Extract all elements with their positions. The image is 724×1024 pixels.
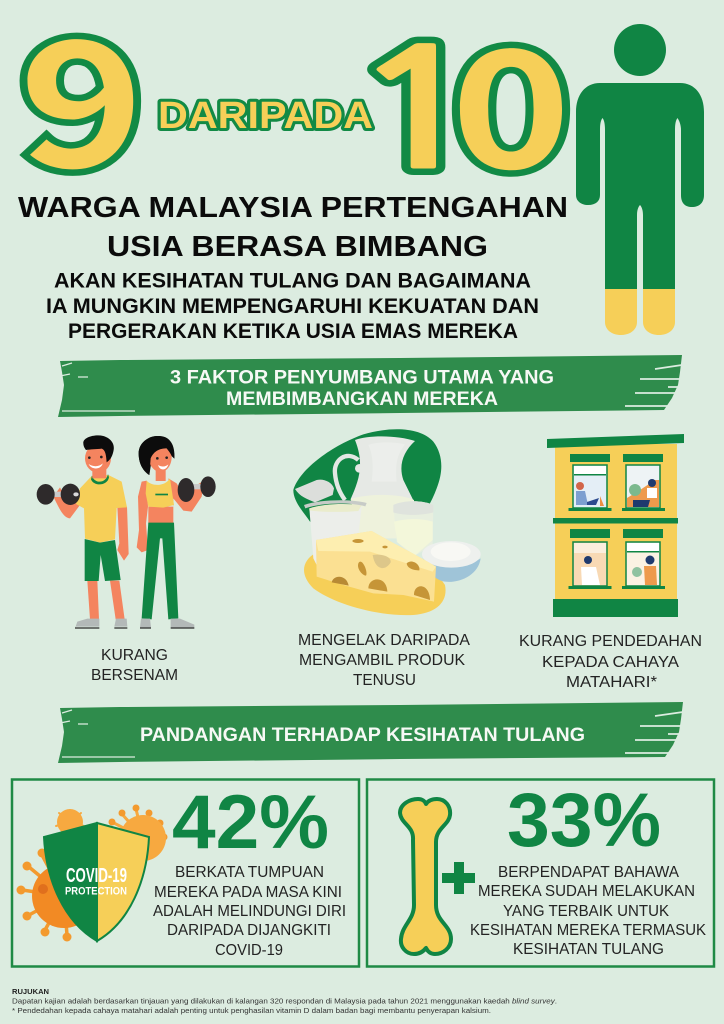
caption: lack of sunlight: KURANG PENDEDAHAN [519,633,702,650]
banner: three factors: MEMBIMBANGKAN MEREKA [226,389,498,410]
caption: lack of sunlight [519,633,702,691]
text: covid focus description: DARIPADA DIJANGKITI [167,922,331,939]
illustration: dairy products [293,429,481,615]
icon: bone [400,799,451,954]
yoghurt lid and cup [295,480,367,565]
yellow plate [304,553,446,615]
window: person on sofa with plant [622,465,665,511]
caption: avoiding dairy [298,632,471,689]
icon: virus particles and shield: COVID-19 [66,865,127,887]
text: covid focus description [153,864,346,959]
subheading [46,270,539,343]
references footnote: Dapatan kajian adalah berdasarkan tinjauan yang dilakukan di kalangan 320 respondan di Malaysia pada tahun 2021 menggunakan kaedah blind survey . [12,996,557,1006]
subheading: PERGERAKAN KETIKA USIA EMAS MEREKA [68,320,518,343]
jug [335,436,415,538]
text: covid focus description: MEREKA PADA MASA KINI [154,884,342,901]
text: covid focus description: BERKATA TUMPUAN [175,864,324,881]
icon: person figure nine in ten [576,24,704,335]
window: woman in orange top with plant [622,542,665,589]
word daripada: DARIPADA [158,95,373,137]
green blob background [293,429,441,525]
glass of milk [393,501,433,557]
cheese wedge [316,531,436,602]
bowl of cream [422,541,481,582]
panel: 33 percent bone health [367,778,714,966]
caption: lack of sunlight: MATAHARI* [566,674,657,691]
big number ten: 1 [346,29,490,193]
panel: 42 percent covid [12,780,359,966]
headline: USIA BERASA BIMBANG [107,231,488,263]
icon: virus particles and shield: PROTECTION [65,886,127,898]
stat: 33%: 33% [507,778,661,863]
text: covid focus description: ADALAH MELINDUNGI DIRI [153,903,346,920]
man [37,435,129,629]
subheading: IA MUNGKIN MEMPENGARUHI KEKUATAN DAN [46,295,539,318]
references footnote [12,987,557,1015]
headline: WARGA MALAYSIA PERTENGAHAN [18,192,568,224]
banner: views on bone health: PANDANGAN TERHADAP KESIHATAN TULANG [140,725,585,746]
caption: lack of exercise: KURANG [101,647,168,664]
caption: avoiding dairy: TENUSU [353,672,416,689]
headline [18,192,568,263]
woman [137,436,216,629]
references footnote: * Pendedahan kepada cahaya matahari adalah penting untuk penghasilan vitamin D dalam badan bagi membantu penyerapan kalsium. [12,1006,491,1015]
window: woman in white top [568,542,612,589]
text: covid focus description: COVID-19 [215,942,283,959]
stat: 42%: 42% [172,780,329,865]
big number ten [346,0,571,215]
caption: lack of exercise [91,647,178,684]
caption: avoiding dairy: MENGAMBIL PRODUK [299,652,466,669]
text: doing their best description [470,864,707,958]
text: doing their best description: BERPENDAPAT BAHAWA [498,864,680,881]
text: doing their best description: KESIHATAN MEREKA TERMASUK [470,922,707,939]
banner: views on bone health [58,702,685,763]
text: doing their best description: MEREKA SUDAH MELAKUKAN [478,883,695,900]
window: woman with laptop [568,465,612,511]
icon: virus particles and shield [16,804,168,942]
illustration: apartment building with people at windows [547,434,684,617]
subheading: AKAN KESIHATAN TULANG DAN BAGAIMANA [54,270,531,292]
caption: avoiding dairy: MENGELAK DARIPADA [298,632,471,649]
references footnote: RUJUKAN [12,987,49,996]
icon: plus sign [442,862,475,894]
caption: lack of exercise: BERSENAM [91,667,178,684]
illustration: two people exercising with dumbbells [37,435,216,629]
banner: three factors: 3 FAKTOR PENYUMBANG UTAMA YANG [170,368,554,388]
text: doing their best description: YANG TERBAIK UNTUK [503,903,670,920]
text: doing their best description: KESIHATAN TULANG [513,941,664,958]
banner: three factors [58,355,684,417]
caption: lack of sunlight: KEPADA CAHAYA [542,654,680,671]
